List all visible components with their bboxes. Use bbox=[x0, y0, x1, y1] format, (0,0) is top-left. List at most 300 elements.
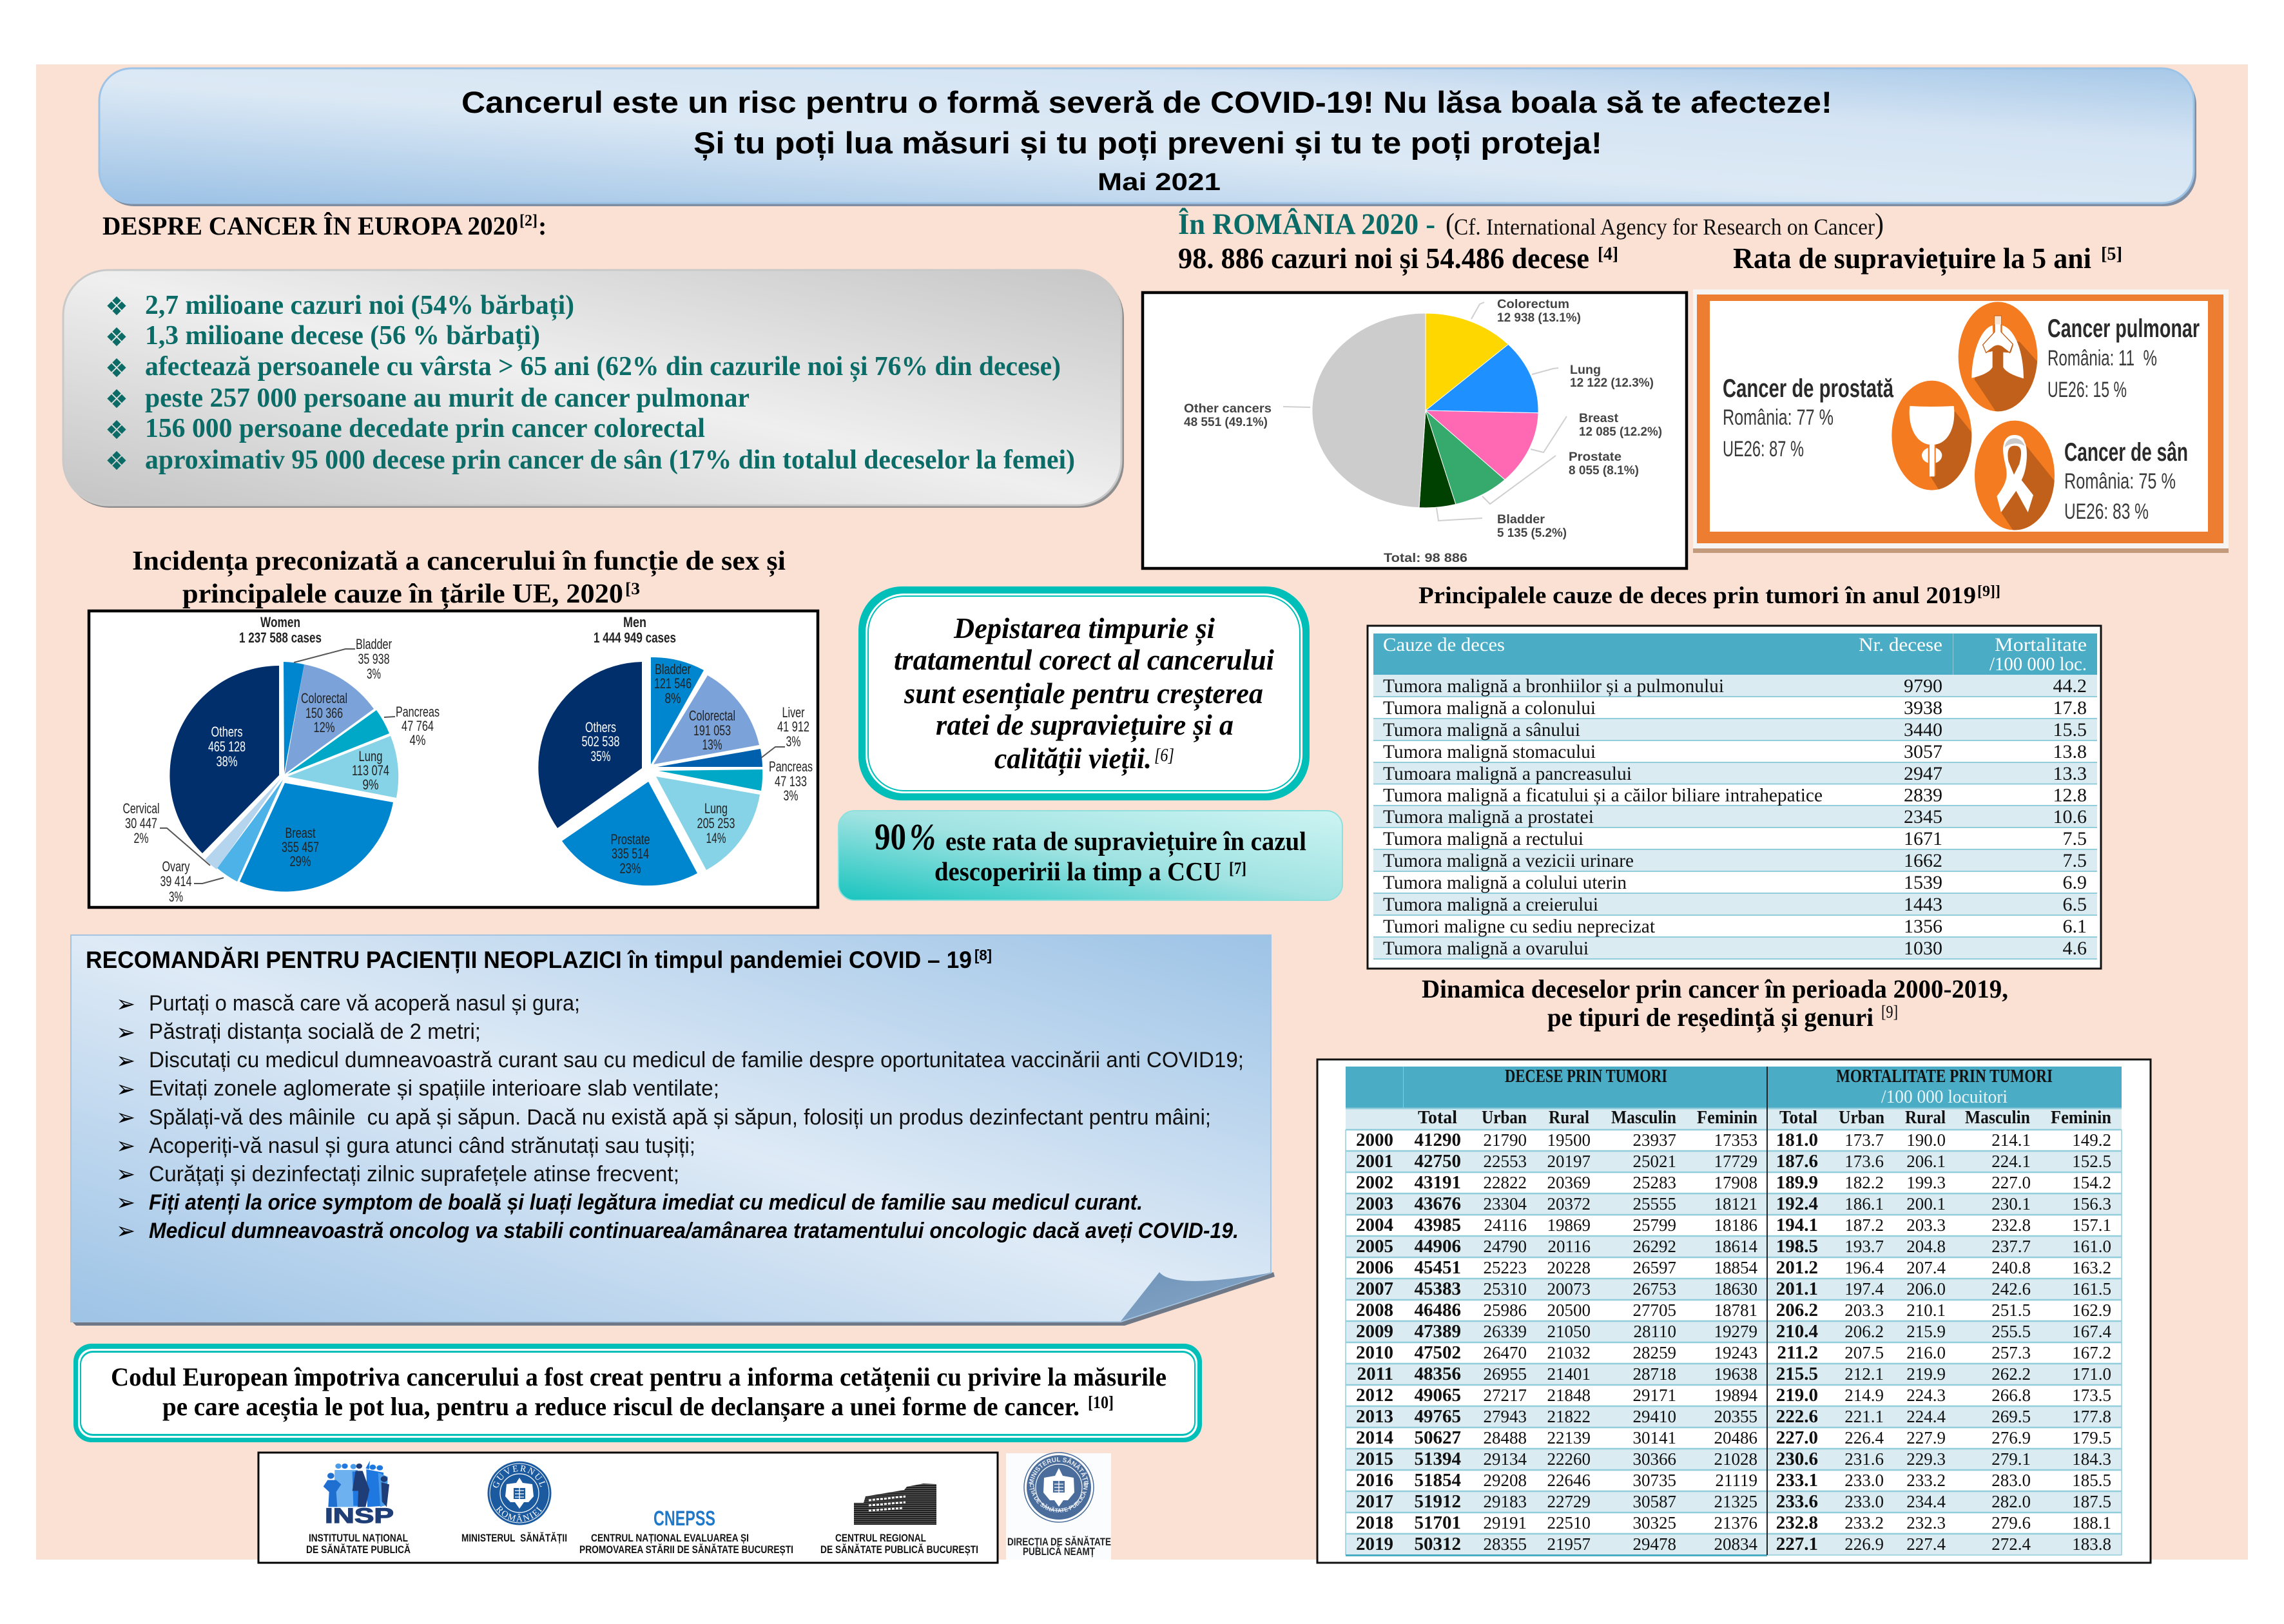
panel: survival rate by cancer type: UE26: 83 % bbox=[2064, 499, 2149, 524]
table: cancer deaths dynamics 2000-2019: 26292 bbox=[1633, 1237, 1676, 1256]
callout: 90% survival rate bbox=[838, 811, 1342, 900]
table: cancer deaths dynamics 2000-2019: 193.7 bbox=[1844, 1237, 1884, 1256]
table: cancer deaths dynamics 2000-2019: 200.1 bbox=[1906, 1194, 1946, 1213]
table: cancer deaths dynamics 2000-2019: 2004 bbox=[1356, 1215, 1393, 1235]
heading: rata de supravietuire: Rata de supraviețuire la 5 ani bbox=[1733, 242, 2091, 275]
pie chart: men: 35% bbox=[590, 748, 611, 764]
logo: Directia de Sanatate Publica Neamt: DIRECȚIA DE SĂNĂTATE PUBLICĂ NEAMȚ bbox=[1029, 1482, 1088, 1513]
table: cancer deaths dynamics 2000-2019: 23304 bbox=[1484, 1194, 1527, 1213]
pie chart: women: 465 128 bbox=[208, 739, 246, 755]
table: cancer deaths dynamics 2000-2019: 192.4 bbox=[1776, 1194, 1818, 1214]
table: cancer deaths dynamics 2000-2019: 230.6 bbox=[1776, 1449, 1818, 1469]
pie chart: women: 4% bbox=[410, 732, 425, 748]
pie chart: women: Women bbox=[260, 614, 300, 630]
pie chart: women: 150 366 bbox=[305, 705, 343, 721]
table: main causes of death: 7.5 bbox=[2062, 850, 2087, 871]
pie chart: women: Others bbox=[211, 724, 242, 740]
pie chart: women: 29% bbox=[290, 853, 311, 869]
table: cancer deaths dynamics 2000-2019: 149.2 bbox=[2072, 1130, 2111, 1150]
table: cancer deaths dynamics 2000-2019: Urban bbox=[1839, 1108, 1884, 1128]
panel: survival rate by cancer type bbox=[1693, 289, 2229, 553]
table: cancer deaths dynamics 2000-2019: 242.6 bbox=[1991, 1279, 2031, 1299]
table: cancer deaths dynamics 2000-2019: 43676 bbox=[1414, 1194, 1461, 1214]
table: main causes of death: 1030 bbox=[1904, 938, 1942, 959]
table: cancer deaths dynamics 2000-2019: 21032 bbox=[1547, 1343, 1591, 1362]
table: cancer deaths dynamics 2000-2019: 214.9 bbox=[1844, 1386, 1884, 1405]
title banner: Și tu poți lua măsuri și tu poți preveni și tu te poți proteja! bbox=[693, 126, 1602, 160]
table: cancer deaths dynamics 2000-2019: 44906 bbox=[1414, 1236, 1461, 1257]
table: cancer deaths dynamics 2000-2019: 42750 bbox=[1414, 1151, 1461, 1172]
table: cancer deaths dynamics 2000-2019: 152.5 bbox=[2072, 1152, 2111, 1171]
table: cancer deaths dynamics 2000-2019: 240.8 bbox=[1991, 1258, 2031, 1277]
table: main causes of death: 1356 bbox=[1904, 916, 1942, 937]
panel: survival rate by cancer type: România: 11 % bbox=[2047, 346, 2157, 371]
table: cancer deaths dynamics 2000-2019: 51854 bbox=[1414, 1470, 1461, 1491]
panel: recommendations for neoplastic patients bbox=[71, 935, 1275, 1326]
table: cancer deaths dynamics 2000-2019: 20197 bbox=[1547, 1152, 1591, 1171]
pie chart: women: 38% bbox=[217, 753, 237, 769]
heading: cazuri noi si decese: [4] bbox=[1598, 244, 1618, 264]
table: cancer deaths dynamics 2000-2019: 25283 bbox=[1633, 1173, 1676, 1192]
table: cancer deaths dynamics 2000-2019: 226.4 bbox=[1844, 1428, 1884, 1447]
table: cancer deaths dynamics 2000-2019: 229.3 bbox=[1906, 1449, 1946, 1469]
table: cancer deaths dynamics 2000-2019: 26339 bbox=[1484, 1322, 1527, 1341]
table: cancer deaths dynamics 2000-2019: 20073 bbox=[1547, 1279, 1591, 1299]
table: cancer deaths dynamics 2000-2019: 154.2 bbox=[2072, 1173, 2111, 1192]
panel: recommendations for neoplastic patients: Medicul dumneavoastră oncolog va stabili continuarea/amânarea tratamentului oncologic dacă aveți COVID-19. bbox=[149, 1219, 1239, 1243]
pie chart: Romania cancer cases: 12 085 (12.2%) bbox=[1579, 425, 1662, 439]
table: cancer deaths dynamics 2000-2019: 167.2 bbox=[2072, 1343, 2111, 1362]
table: cancer deaths dynamics 2000-2019: 51394 bbox=[1414, 1449, 1461, 1469]
panel: recommendations for neoplastic patients: RECOMANDĂRI PENTRU PACIENȚII NEOPLAZICI în timpul pandemiei COVID – 19 bbox=[86, 947, 972, 974]
table: cancer deaths dynamics 2000-2019: 45451 bbox=[1414, 1257, 1461, 1278]
table: cancer deaths dynamics 2000-2019: 21325 bbox=[1714, 1492, 1757, 1511]
table: cancer deaths dynamics 2000-2019: 210.1 bbox=[1906, 1300, 1946, 1320]
callout: early detection: Depistarea timpurie și bbox=[953, 612, 1215, 645]
panel: recommendations for neoplastic patients: Purtați o mască care vă acoperă nasul și gura; bbox=[149, 991, 580, 1016]
pie chart: men: 1 444 949 cases bbox=[594, 630, 676, 646]
table: cancer deaths dynamics 2000-2019: 21028 bbox=[1714, 1449, 1757, 1469]
table: main causes of death: Tumora malignă a colului uterin bbox=[1383, 872, 1627, 893]
table: cancer deaths dynamics 2000-2019: 20834 bbox=[1714, 1534, 1758, 1554]
table: cancer deaths dynamics 2000-2019: 269.5 bbox=[1991, 1407, 2031, 1426]
pie chart: men: 8% bbox=[665, 690, 681, 706]
panel: recommendations for neoplastic patients: Fiți atenți la orice symptom de boală și luați legătura imediat cu medicul de familie sau medicul curant. bbox=[149, 1190, 1143, 1215]
panel: survival rate by cancer type: Cancer pulmonar bbox=[2047, 314, 2200, 343]
pie chart: women: 113 074 bbox=[352, 762, 389, 778]
table: cancer deaths dynamics 2000-2019: 221.1 bbox=[1844, 1407, 1884, 1426]
panel: institution logos: DE SĂNĂTATE PUBLICĂ bbox=[306, 1543, 411, 1556]
callout: 90% survival rate: [7] bbox=[1229, 859, 1246, 878]
table: main causes of death: Tumora malignă a rectului bbox=[1383, 828, 1583, 849]
table: main causes of death: 3057 bbox=[1904, 741, 1942, 762]
table: cancer deaths dynamics 2000-2019: 181.0 bbox=[1776, 1130, 1818, 1150]
table: cancer deaths dynamics 2000-2019: 233.0 bbox=[1844, 1471, 1884, 1490]
table: cancer deaths dynamics 2000-2019: 215.9 bbox=[1906, 1322, 1946, 1341]
table: cancer deaths dynamics 2000-2019: 210.4 bbox=[1776, 1321, 1818, 1342]
heading: dinamica deceselor: Dinamica deceselor prin cancer în perioada 2000-2019, bbox=[1422, 974, 2008, 1003]
panel: institution logos: INSTITUTUL NAȚIONAL bbox=[309, 1532, 408, 1544]
panel: recommendations for neoplastic patients: Spălați-vă des mâinile cu apă și săpun. Dacă nu există apă și săpun, folosiți un produs dezinfectant pentru mâini; bbox=[149, 1105, 1211, 1130]
table: cancer deaths dynamics 2000-2019: 2018 bbox=[1356, 1513, 1393, 1533]
table: main causes of death: 10.6 bbox=[2053, 806, 2087, 827]
logo: INSP bbox=[324, 1461, 394, 1527]
table: cancer deaths dynamics 2000-2019: 19869 bbox=[1547, 1215, 1591, 1235]
table: cancer deaths dynamics 2000-2019: 212.1 bbox=[1844, 1364, 1884, 1384]
table: cancer deaths dynamics 2000-2019: Feminin bbox=[2051, 1108, 2111, 1128]
table: cancer deaths dynamics 2000-2019: 49065 bbox=[1414, 1385, 1461, 1406]
table: cancer deaths dynamics 2000-2019: 276.9 bbox=[1991, 1428, 2031, 1447]
logo: Government seal: GUVERNUL bbox=[492, 1465, 545, 1487]
table: cancer deaths dynamics 2000-2019: 25555 bbox=[1633, 1194, 1676, 1213]
table: cancer deaths dynamics 2000-2019: 2000 bbox=[1356, 1130, 1393, 1150]
panel: institution logos: MINISTERUL SĂNĂTĂȚII bbox=[461, 1532, 567, 1544]
table: main causes of death: Tumora malignă a ficatului și a căilor biliare intrahepatice bbox=[1383, 785, 1823, 806]
table: cancer deaths dynamics 2000-2019: 182.2 bbox=[1844, 1173, 1884, 1192]
heading: principalele cauze de deces: [9]] bbox=[1977, 583, 2000, 600]
table: cancer deaths dynamics 2000-2019: 219.9 bbox=[1906, 1364, 1946, 1384]
pie chart: men: 191 053 bbox=[693, 722, 731, 739]
panel: despre cancer bullets: ❖ bbox=[105, 323, 128, 353]
table: cancer deaths dynamics 2000-2019: 29171 bbox=[1633, 1386, 1676, 1405]
table: cancer deaths dynamics 2000-2019: 25799 bbox=[1633, 1215, 1676, 1235]
table: cancer deaths dynamics 2000-2019: 22510 bbox=[1547, 1513, 1591, 1532]
table: cancer deaths dynamics 2000-2019: 231.6 bbox=[1844, 1449, 1884, 1469]
pie chart: Romania cancer cases: 5 135 (5.2%) bbox=[1497, 527, 1567, 540]
panel: recommendations for neoplastic patients: ➢ bbox=[116, 1161, 135, 1188]
table: cancer deaths dynamics 2000-2019: 25223 bbox=[1484, 1258, 1527, 1277]
table: cancer deaths dynamics 2000-2019: 26597 bbox=[1633, 1258, 1676, 1277]
table: main causes of death: Tumora malignă a bronhiilor și a pulmonului bbox=[1383, 675, 1724, 697]
table: cancer deaths dynamics 2000-2019: 186.1 bbox=[1844, 1194, 1884, 1213]
heading: in Romania 2020: În ROMÂNIA 2020 - bbox=[1178, 208, 1435, 241]
table: cancer deaths dynamics 2000-2019: 185.5 bbox=[2072, 1471, 2111, 1490]
table: cancer deaths dynamics 2000-2019: 19500 bbox=[1547, 1130, 1591, 1150]
table: cancer deaths dynamics 2000-2019: 20500 bbox=[1547, 1300, 1591, 1320]
pie chart: Romania cancer cases: Bladder bbox=[1497, 513, 1545, 527]
pie chart: men: 205 253 bbox=[697, 815, 735, 831]
heading: despre cancer in Europa: : bbox=[538, 211, 547, 240]
table: cancer deaths dynamics 2000-2019: 190.0 bbox=[1906, 1130, 1946, 1150]
panel: despre cancer bullets bbox=[63, 270, 1124, 508]
table: cancer deaths dynamics 2000-2019: 233.1 bbox=[1776, 1470, 1818, 1491]
logo: Directia de Sanatate Publica Neamt bbox=[1006, 1452, 1111, 1560]
panel: despre cancer bullets: ❖ bbox=[105, 447, 128, 476]
table: cancer deaths dynamics 2000-2019: 171.0 bbox=[2072, 1364, 2111, 1384]
callout: European code against cancer bbox=[73, 1344, 1202, 1442]
table: main causes of death: 6.9 bbox=[2062, 872, 2087, 893]
table: cancer deaths dynamics 2000-2019: 22729 bbox=[1547, 1492, 1591, 1511]
pie chart: women: 39 414 bbox=[160, 873, 192, 889]
table: main causes of death: 44.2 bbox=[2053, 675, 2087, 697]
table: cancer deaths dynamics 2000-2019: 199.3 bbox=[1906, 1173, 1946, 1192]
table: cancer deaths dynamics 2000-2019: 272.4 bbox=[1991, 1534, 2031, 1554]
table: cancer deaths dynamics 2000-2019: Total bbox=[1418, 1108, 1457, 1128]
table: cancer deaths dynamics 2000-2019: 283.0 bbox=[1991, 1471, 2031, 1490]
logo: Directia de Sanatate Publica Neamt: MINISTERUL SĂNĂTĂȚII bbox=[1029, 1457, 1089, 1485]
table: cancer deaths dynamics 2000-2019: 251.5 bbox=[1991, 1300, 2031, 1320]
table: cancer deaths dynamics 2000-2019: 232.8 bbox=[1776, 1513, 1818, 1533]
pie chart: men: 47 133 bbox=[775, 773, 807, 789]
pie chart: men: Bladder bbox=[655, 661, 691, 677]
panel: recommendations for neoplastic patients: Evitați zonele aglomerate și spațiile interioare slab ventilate; bbox=[149, 1076, 719, 1101]
pie chart: Romania cancer cases: Prostate bbox=[1569, 450, 1621, 464]
logo: Government seal bbox=[487, 1462, 552, 1525]
table: cancer deaths dynamics 2000-2019: 161.0 bbox=[2072, 1237, 2111, 1256]
panel: institution logos bbox=[258, 1451, 999, 1563]
panel: survival rate by cancer type: UE26: 87 % bbox=[1723, 437, 1804, 461]
pie chart: Romania cancer cases: 8 055 (8.1%) bbox=[1569, 464, 1639, 478]
logo: Government seal: ROMÂNIEI bbox=[496, 1505, 542, 1522]
pie chart: women: 3% bbox=[169, 889, 183, 905]
table: cancer deaths dynamics 2000-2019: 22822 bbox=[1484, 1173, 1527, 1192]
table: cancer deaths dynamics 2000-2019: 184.3 bbox=[2072, 1449, 2111, 1469]
panel: recommendations for neoplastic patients: [8] bbox=[974, 947, 992, 963]
table: cancer deaths dynamics 2000-2019: 162.9 bbox=[2072, 1300, 2111, 1320]
table: cancer deaths dynamics 2000-2019: 30366 bbox=[1633, 1449, 1676, 1469]
heading: dinamica deceselor: [9] bbox=[1881, 1002, 1898, 1021]
table: cancer deaths dynamics 2000-2019: 232.8 bbox=[1991, 1215, 2031, 1235]
table: cancer deaths dynamics 2000-2019: 206.0 bbox=[1906, 1279, 1946, 1299]
table: cancer deaths dynamics 2000-2019: 29183 bbox=[1484, 1492, 1527, 1511]
panel: despre cancer bullets: peste 257 000 persoane au murit de cancer pulmonar bbox=[145, 383, 750, 413]
table: cancer deaths dynamics 2000-2019 bbox=[1317, 1059, 2151, 1563]
pie chart: women: 47 764 bbox=[402, 718, 434, 734]
table: cancer deaths dynamics 2000-2019: 2010 bbox=[1356, 1342, 1393, 1363]
table: cancer deaths dynamics 2000-2019: 177.8 bbox=[2072, 1407, 2111, 1426]
table: main causes of death: 1443 bbox=[1904, 894, 1942, 915]
table: cancer deaths dynamics 2000-2019: 43191 bbox=[1414, 1172, 1461, 1193]
heading: in Romania 2020: ( bbox=[1446, 207, 1455, 240]
panel: despre cancer bullets: 156 000 persoane decedate prin cancer colorectal bbox=[145, 414, 705, 443]
panel: recommendations for neoplastic patients: ➢ bbox=[116, 991, 135, 1018]
table: cancer deaths dynamics 2000-2019: 21376 bbox=[1714, 1513, 1757, 1532]
table: cancer deaths dynamics 2000-2019: Feminin bbox=[1697, 1108, 1757, 1128]
table: main causes of death: 1671 bbox=[1904, 828, 1942, 849]
panel: recommendations for neoplastic patients: Acoperiți-vă nasul și gura atunci când strănutați sau tușiți; bbox=[149, 1134, 695, 1158]
panel: recommendations for neoplastic patients: ➢ bbox=[116, 1105, 135, 1131]
pie chart: men: 41 912 bbox=[777, 719, 809, 735]
table: main causes of death: Tumora malignă a prostatei bbox=[1383, 806, 1594, 827]
heading: dinamica deceselor: pe tipuri de reședință și genuri bbox=[1547, 1003, 1873, 1032]
panel: institution logos: CENTRUL REGIONAL bbox=[835, 1532, 926, 1544]
table: cancer deaths dynamics 2000-2019: 25986 bbox=[1484, 1300, 1527, 1320]
table: cancer deaths dynamics 2000-2019: 26955 bbox=[1484, 1364, 1527, 1384]
heading: despre cancer in Europa: DESPRE CANCER ÎN EUROPA 2020 bbox=[102, 211, 518, 240]
table: main causes of death: Tumora malignă a vezicii urinare bbox=[1383, 850, 1634, 871]
callout: 90% survival rate: 90 bbox=[875, 816, 906, 858]
table: main causes of death: Tumora malignă stomacului bbox=[1383, 741, 1596, 762]
heading: despre cancer in Europa: [2] bbox=[519, 212, 537, 229]
panel: despre cancer bullets: afectează persoanele cu vârsta > 65 ani (62% din cazurile noi și 76% din decese) bbox=[145, 352, 1061, 382]
pie chart: women: 2% bbox=[134, 830, 148, 846]
table: cancer deaths dynamics 2000-2019: 207.4 bbox=[1906, 1258, 1946, 1277]
table: cancer deaths dynamics 2000-2019: 23937 bbox=[1633, 1130, 1676, 1150]
table: main causes of death: Cauze de deces bbox=[1383, 634, 1505, 655]
pie chart: men: Pancreas bbox=[769, 759, 813, 775]
table: cancer deaths dynamics 2000-2019: 173.5 bbox=[2072, 1386, 2111, 1405]
table: cancer deaths dynamics 2000-2019: 224.3 bbox=[1906, 1386, 1946, 1405]
pie chart: women: Colorectal bbox=[301, 690, 347, 706]
table: cancer deaths dynamics 2000-2019: 233.0 bbox=[1844, 1492, 1884, 1511]
pie chart: women: Ovary bbox=[162, 858, 189, 875]
table: cancer deaths dynamics 2000-2019: 194.1 bbox=[1776, 1215, 1818, 1235]
table: cancer deaths dynamics 2000-2019: 156.3 bbox=[2072, 1194, 2111, 1213]
table: cancer deaths dynamics 2000-2019: 27943 bbox=[1484, 1407, 1527, 1426]
table: cancer deaths dynamics 2000-2019: 201.2 bbox=[1776, 1257, 1818, 1278]
table: cancer deaths dynamics 2000-2019: 179.5 bbox=[2072, 1428, 2111, 1447]
callout: early detection: sunt esențiale pentru creșterea bbox=[904, 677, 1263, 710]
table: cancer deaths dynamics 2000-2019: 29191 bbox=[1484, 1513, 1527, 1532]
table: main causes of death: 6.5 bbox=[2062, 894, 2087, 915]
heading: incidenta preconizata: principalele cauze în țările UE, 2020 bbox=[182, 579, 623, 610]
table: cancer deaths dynamics 2000-2019: 20355 bbox=[1714, 1407, 1757, 1426]
heading: incidenta preconizata: [3 bbox=[625, 579, 640, 598]
panel: recommendations for neoplastic patients: Discutați cu medicul dumneavoastră curant sau cu medicul de familie despre oportunitatea vaccinării anti COVID19; bbox=[149, 1048, 1244, 1072]
pie chart: women: 12% bbox=[313, 719, 335, 735]
table: cancer deaths dynamics 2000-2019: 2013 bbox=[1356, 1406, 1393, 1427]
table: cancer deaths dynamics 2000-2019: 257.3 bbox=[1991, 1343, 2031, 1362]
table: cancer deaths dynamics 2000-2019: 173.6 bbox=[1844, 1152, 1884, 1171]
pie chart: men: 14% bbox=[706, 830, 726, 846]
panel: institution logos: PROMOVAREA STĂRII DE SĂNĂTATE BUCUREȘTI bbox=[579, 1543, 793, 1556]
table: main causes of death: Tumora malignă a creierului bbox=[1383, 894, 1598, 915]
heading: rata de supravietuire: [5] bbox=[2101, 244, 2122, 264]
logo: building bbox=[854, 1484, 936, 1525]
table: cancer deaths dynamics 2000-2019: 2017 bbox=[1356, 1491, 1393, 1512]
table: cancer deaths dynamics 2000-2019: 45383 bbox=[1414, 1279, 1461, 1299]
icon: page curl bbox=[1121, 1272, 1271, 1321]
table: cancer deaths dynamics 2000-2019: 19243 bbox=[1714, 1343, 1757, 1362]
table: cancer deaths dynamics 2000-2019: 282.0 bbox=[1991, 1492, 2031, 1511]
panel: recommendations for neoplastic patients: ➢ bbox=[116, 1133, 135, 1159]
table: cancer deaths dynamics 2000-2019: 17908 bbox=[1714, 1173, 1757, 1192]
callout: early detection bbox=[858, 586, 1310, 800]
table: cancer deaths dynamics 2000-2019: Masculin bbox=[1965, 1108, 2030, 1128]
table: cancer deaths dynamics 2000-2019: 18186 bbox=[1714, 1215, 1757, 1235]
table: main causes of death: 1662 bbox=[1904, 850, 1942, 871]
table: cancer deaths dynamics 2000-2019: 224.4 bbox=[1906, 1407, 1946, 1426]
title banner: Mai 2021 bbox=[1098, 169, 1221, 196]
panel: despre cancer bullets: ❖ bbox=[105, 385, 128, 414]
pie chart: Romania cancer cases: 48 551 (49.1%) bbox=[1184, 416, 1268, 429]
table: cancer deaths dynamics 2000-2019: 189.9 bbox=[1776, 1172, 1818, 1193]
pie chart: women: 35 938 bbox=[358, 651, 389, 667]
logo: CNEPSS: CNEPSS bbox=[653, 1507, 715, 1530]
table: cancer deaths dynamics 2000-2019: 21050 bbox=[1547, 1322, 1591, 1341]
heading: in Romania 2020: Cf. International Agency for Research on Cancer bbox=[1454, 214, 1875, 240]
pie chart: men: Colorectal bbox=[689, 708, 735, 724]
pie chart: Romania cancer cases: 12 122 (12.3%) bbox=[1570, 376, 1654, 390]
table: cancer deaths dynamics 2000-2019: 20116 bbox=[1548, 1237, 1591, 1256]
pie chart: men: Prostate bbox=[611, 831, 650, 847]
heading: dinamica deceselor bbox=[1422, 974, 2008, 1032]
table: main causes of death bbox=[1368, 626, 2101, 969]
table: cancer deaths dynamics 2000-2019: 197.4 bbox=[1844, 1279, 1884, 1299]
title banner: Cancerul este un risc pentru o formă severă de COVID-19! Nu lăsa boala să te afecteze! bbox=[461, 85, 1832, 119]
table: cancer deaths dynamics 2000-2019: 173.7 bbox=[1844, 1130, 1884, 1150]
table: cancer deaths dynamics 2000-2019: 51701 bbox=[1414, 1513, 1461, 1533]
panel: recommendations for neoplastic patients: ➢ bbox=[116, 1076, 135, 1103]
table: cancer deaths dynamics 2000-2019: 216.0 bbox=[1906, 1343, 1946, 1362]
table: main causes of death: 12.8 bbox=[2053, 785, 2087, 806]
table: cancer deaths dynamics 2000-2019: 2016 bbox=[1356, 1470, 1393, 1491]
callout: European code against cancer: pe care aceștia le pot lua, pentru a reduce riscul de declanșare a unei forme de cancer. bbox=[162, 1392, 1079, 1422]
table: cancer deaths dynamics 2000-2019: 18781 bbox=[1714, 1300, 1757, 1320]
pie chart: Romania cancer cases: Total: 98 886 bbox=[1384, 552, 1467, 565]
table: cancer deaths dynamics 2000-2019: 27217 bbox=[1484, 1386, 1527, 1405]
table: cancer deaths dynamics 2000-2019: 196.4 bbox=[1844, 1258, 1884, 1277]
pie chart: Romania cancer cases: Breast bbox=[1579, 412, 1619, 425]
table: cancer deaths dynamics 2000-2019: 2011 bbox=[1357, 1364, 1393, 1384]
table: cancer deaths dynamics 2000-2019: 233.2 bbox=[1844, 1513, 1884, 1532]
table: main causes of death: 1539 bbox=[1904, 872, 1942, 893]
table: cancer deaths dynamics 2000-2019: 237.7 bbox=[1991, 1237, 2031, 1256]
table: main causes of death: Tumora malignă a sânului bbox=[1383, 719, 1580, 740]
table: cancer deaths dynamics 2000-2019: 24116 bbox=[1484, 1215, 1527, 1235]
panel: institution logos: CENTRUL NAȚIONAL EVALUAREA ȘI bbox=[591, 1532, 749, 1544]
table: main causes of death: 2839 bbox=[1904, 785, 1942, 806]
pie chart: women: 355 457 bbox=[282, 839, 319, 855]
pie chart: Romania cancer cases: Lung bbox=[1570, 363, 1601, 377]
pie chart: women: Pancreas bbox=[396, 704, 440, 720]
callout: early detection: calității vieții. bbox=[994, 742, 1152, 775]
pie chart: Romania cancer cases: Colorectum bbox=[1497, 298, 1569, 311]
table: cancer deaths dynamics 2000-2019: /100 000 locuitori bbox=[1881, 1087, 2008, 1107]
table: cancer deaths dynamics 2000-2019: 50312 bbox=[1414, 1534, 1461, 1554]
heading: incidenta preconizata bbox=[132, 546, 786, 610]
table: main causes of death: Tumoara malignă a pancreasului bbox=[1383, 763, 1632, 784]
table: cancer deaths dynamics 2000-2019: 2007 bbox=[1356, 1279, 1393, 1299]
table: cancer deaths dynamics 2000-2019: 22646 bbox=[1547, 1471, 1591, 1490]
table: cancer deaths dynamics 2000-2019: 255.5 bbox=[1991, 1322, 2031, 1341]
pie chart: men: Lung bbox=[704, 800, 728, 817]
table: cancer deaths dynamics 2000-2019: 262.2 bbox=[1991, 1364, 2031, 1384]
table: cancer deaths dynamics 2000-2019: 206.2 bbox=[1776, 1300, 1818, 1320]
table: cancer deaths dynamics 2000-2019: 25021 bbox=[1633, 1152, 1676, 1171]
callout: 90% survival rate: este rata de supraviețuire în cazul bbox=[945, 826, 1306, 856]
callout: European code against cancer: [10] bbox=[1088, 1393, 1114, 1412]
table: cancer deaths dynamics 2000-2019: 183.8 bbox=[2072, 1534, 2111, 1554]
table: cancer deaths dynamics 2000-2019: 29410 bbox=[1633, 1407, 1676, 1426]
table: cancer deaths dynamics 2000-2019: 29478 bbox=[1633, 1534, 1676, 1554]
chart panel: women and men pies bbox=[89, 611, 818, 907]
table: main causes of death: Nr. decese bbox=[1859, 634, 1942, 655]
table: cancer deaths dynamics 2000-2019: 211.2 bbox=[1777, 1342, 1818, 1363]
table: main causes of death: 3938 bbox=[1904, 697, 1942, 719]
callout: 90% survival rate: descoperirii la timp a CCU bbox=[934, 856, 1221, 886]
heading: in Romania 2020: ) bbox=[1875, 207, 1884, 240]
table: cancer deaths dynamics 2000-2019: 28110 bbox=[1633, 1322, 1676, 1341]
heading: cazuri noi si decese: 98. 886 cazuri noi și 54.486 decese bbox=[1178, 242, 1589, 275]
panel: recommendations for neoplastic patients: ➢ bbox=[116, 1020, 135, 1046]
table: cancer deaths dynamics 2000-2019: 227.0 bbox=[1776, 1427, 1818, 1448]
panel: recommendations for neoplastic patients: Curățați și dezinfectați zilnic suprafețele atinse frecvent; bbox=[149, 1162, 679, 1186]
pie chart: men: 121 546 bbox=[654, 675, 692, 691]
table: cancer deaths dynamics 2000-2019: 19279 bbox=[1714, 1322, 1757, 1341]
callout: early detection: [6] bbox=[1154, 746, 1174, 766]
table: cancer deaths dynamics 2000-2019: 279.1 bbox=[1991, 1449, 2031, 1469]
table: cancer deaths dynamics 2000-2019: 46486 bbox=[1414, 1300, 1461, 1320]
table: cancer deaths dynamics 2000-2019: 20372 bbox=[1547, 1194, 1591, 1213]
table: main causes of death: Tumora malignă a colonului bbox=[1383, 697, 1596, 719]
table: cancer deaths dynamics 2000-2019: 214.1 bbox=[1991, 1130, 2031, 1150]
pie chart: women: 1 237 588 cases bbox=[239, 630, 322, 646]
table: cancer deaths dynamics 2000-2019: 22260 bbox=[1547, 1449, 1591, 1469]
table: cancer deaths dynamics 2000-2019: 30587 bbox=[1633, 1492, 1676, 1511]
table: cancer deaths dynamics 2000-2019: 25310 bbox=[1484, 1279, 1527, 1299]
table: cancer deaths dynamics 2000-2019: 27705 bbox=[1633, 1300, 1676, 1320]
